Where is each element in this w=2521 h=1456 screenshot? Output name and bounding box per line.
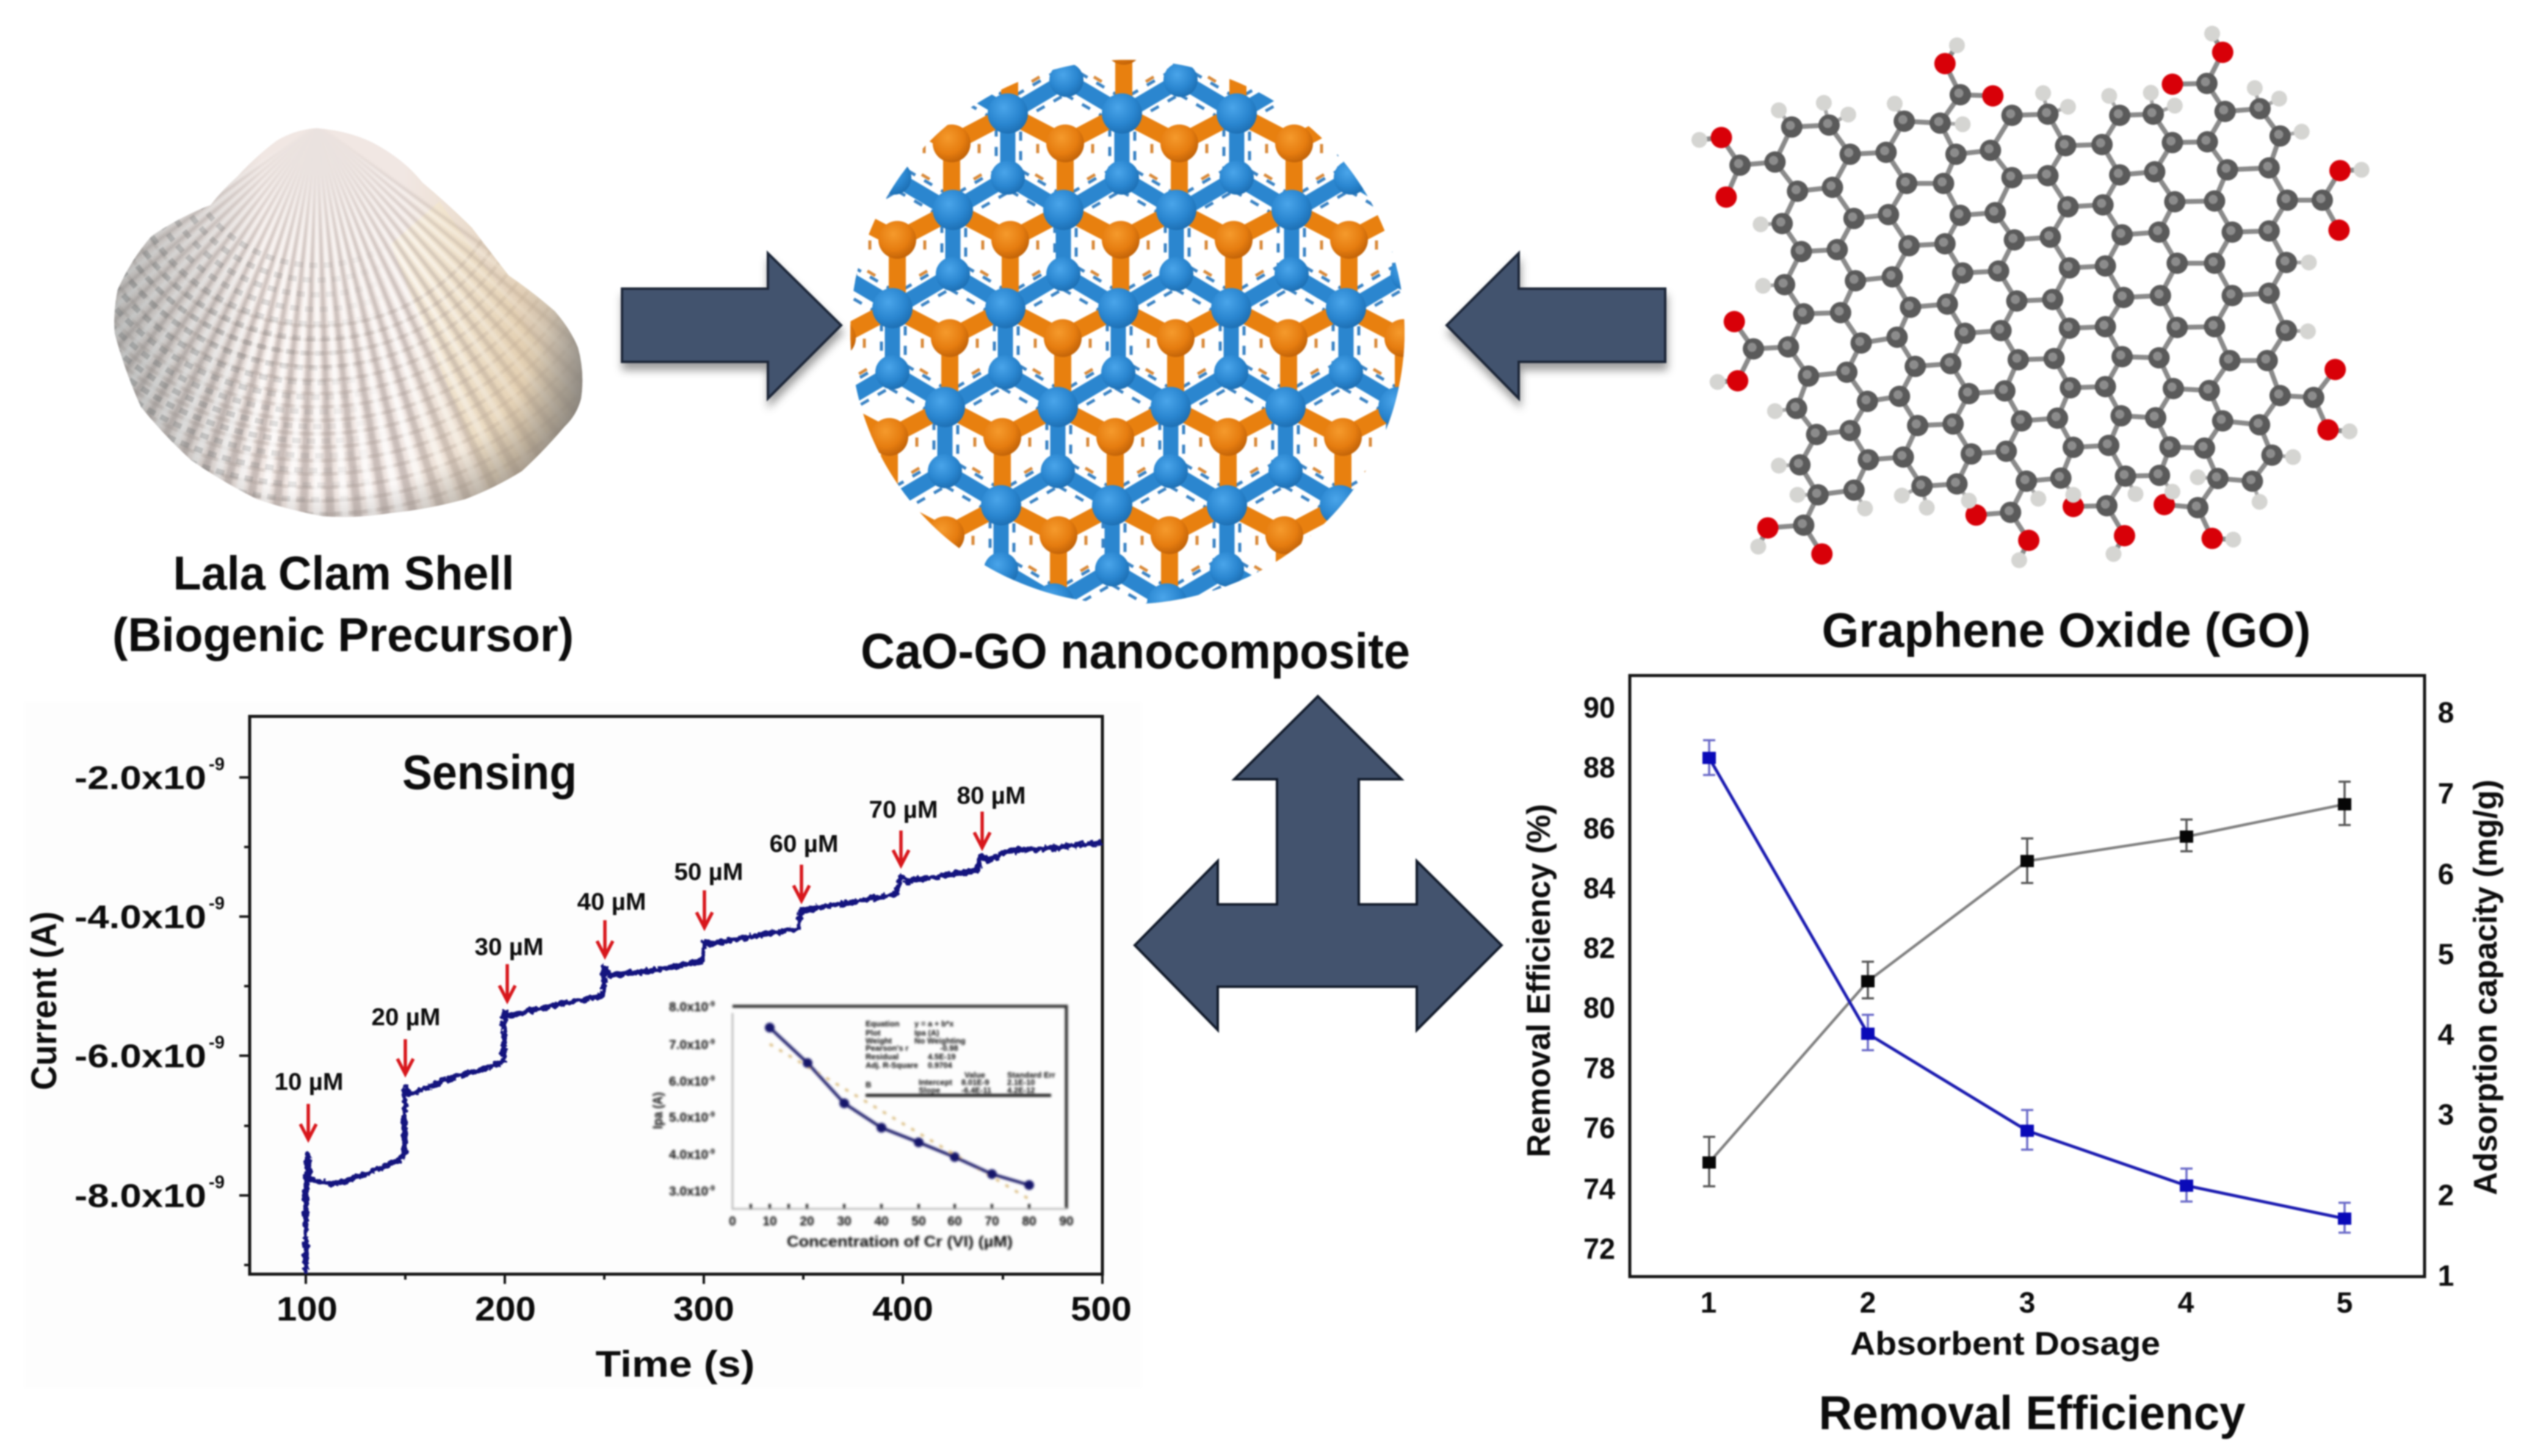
- x axis labels: 3: [2019, 1287, 2035, 1319]
- label: CaO-GO nanocomposite: CaO-GO nanocomposite: [861, 624, 1410, 679]
- inset chart: 4.5E-19: [928, 1052, 956, 1061]
- x axis tick labels: 300: [673, 1289, 734, 1328]
- hydrogen bonds: [1760, 88, 2309, 508]
- y axis title: Current (A): [24, 912, 64, 1090]
- left axis labels: 76: [1583, 1112, 1615, 1145]
- right axis labels: 5: [2438, 939, 2454, 971]
- left axis labels: 88: [1583, 752, 1615, 784]
- carbon bonds: [1699, 34, 2362, 560]
- x axis title: Time (s): [596, 1344, 754, 1385]
- blue layer: [852, 62, 1403, 605]
- x axis labels: 4: [2178, 1287, 2194, 1319]
- label: lala clam shell: (Biogenic Precursor): [112, 608, 574, 661]
- concentration labels: 10 µM: [275, 1069, 343, 1095]
- inset chart: -6.4E-11: [961, 1086, 991, 1095]
- left axis labels: [1583, 692, 1615, 1266]
- concentration labels: 40 µM: [577, 888, 646, 915]
- right axis labels: 4: [2438, 1019, 2454, 1051]
- inset chart: [650, 1000, 1074, 1250]
- y axis tick labels: -9: [209, 754, 225, 774]
- inset chart: -9: [708, 1074, 715, 1083]
- inset chart: y = a + b*x: [914, 1019, 954, 1028]
- x axis labels: 2: [1860, 1287, 1876, 1319]
- right axis title: Adsorption capacity (mg/g): [2467, 780, 2504, 1195]
- right axis labels: 7: [2438, 778, 2454, 810]
- inset chart: 6.0x10: [669, 1075, 708, 1089]
- heading: removal efficiency: Removal Efficiency: [1819, 1386, 2245, 1440]
- left axis labels: 80: [1583, 992, 1615, 1025]
- inset chart: Concentration of Cr (VI) (µM): [787, 1233, 1013, 1250]
- inset chart: B: [866, 1080, 871, 1089]
- label: lala clam shell: Lala Clam Shell: [173, 546, 514, 600]
- inset chart: -0.98: [940, 1043, 958, 1053]
- inset chart: 8.01E-9: [961, 1078, 989, 1087]
- inset chart: 4.0x10: [669, 1148, 708, 1162]
- inset chart: Equation: [866, 1019, 900, 1028]
- inset chart: 7.0x10: [669, 1038, 708, 1052]
- inset chart: Pearson's r: [866, 1043, 908, 1053]
- left axis labels: 84: [1583, 873, 1615, 905]
- left axis labels: 90: [1583, 692, 1615, 724]
- orange layer: [849, 59, 1406, 604]
- inset chart: 4.2E-12: [1007, 1086, 1035, 1095]
- x axis title: Absorbent Dosage: [1850, 1325, 2160, 1362]
- arrow: shell to nanocomposite: [622, 253, 841, 398]
- concentration labels: 30 µM: [475, 934, 543, 960]
- inset chart: -9: [708, 1147, 715, 1156]
- right axis labels: 2: [2438, 1180, 2454, 1212]
- inset chart: 0: [729, 1214, 736, 1228]
- inset chart: Slope: [919, 1086, 940, 1095]
- plot frame and ticks: [239, 716, 1102, 1284]
- right axis labels: 8: [2438, 697, 2454, 729]
- inset chart: 30: [837, 1214, 852, 1228]
- inset chart: 50: [911, 1214, 926, 1228]
- panel: sensing chart: [24, 702, 1141, 1388]
- concentration labels: 60 µM: [769, 831, 839, 857]
- inset chart: Weight: [866, 1036, 892, 1045]
- inset chart: -9: [708, 1110, 715, 1119]
- heading: sensing: Sensing: [402, 745, 577, 799]
- inset chart: 20: [800, 1214, 814, 1228]
- current trace: [306, 842, 1102, 1274]
- inset chart: Standard Err: [1007, 1070, 1055, 1079]
- label: graphene oxide: Graphene Oxide (GO): [1821, 603, 2311, 657]
- right axis labels: 3: [2438, 1099, 2454, 1131]
- carbon atom highlights: [1738, 82, 2321, 524]
- x axis tick labels: 100: [277, 1289, 338, 1328]
- y axis tick labels: -6.0x10: [74, 1038, 206, 1075]
- arrow: three-way nanocomposite arrow: [1135, 696, 1502, 1030]
- x axis labels: 1: [1701, 1287, 1716, 1319]
- adsorption capacity series: [1702, 782, 2351, 1186]
- icon: lala clam shell: [114, 128, 584, 517]
- red concentration arrows: [300, 812, 990, 1139]
- inset chart: 2.1E-10: [1007, 1078, 1035, 1087]
- inset chart: Residual: [866, 1052, 899, 1061]
- concentration labels: 70 µM: [869, 796, 938, 823]
- concentration labels: 20 µM: [371, 1004, 441, 1031]
- inset chart: Value: [964, 1070, 985, 1079]
- icon: graphene oxide molecule: [1699, 34, 2362, 560]
- inset chart: No Weighting: [914, 1036, 966, 1045]
- carbon atoms: [1740, 84, 2322, 525]
- x axis labels: [1701, 1287, 2353, 1319]
- left axis labels: 86: [1583, 813, 1615, 845]
- inset chart: -9: [708, 1037, 715, 1046]
- right axis labels: 1: [2438, 1260, 2454, 1292]
- arrow: graphene oxide to nanocomposite: [1447, 253, 1665, 398]
- inset chart: Intercept: [919, 1078, 953, 1087]
- hydrogen atoms: [1699, 34, 2362, 560]
- inset chart: -9: [708, 1184, 715, 1192]
- inset chart: 70: [985, 1214, 999, 1228]
- inset chart: Plot: [866, 1028, 881, 1037]
- concentration labels: [275, 782, 1025, 1095]
- oxygen atoms: [1721, 52, 2340, 554]
- panel: removal efficiency chart: [1521, 676, 2504, 1440]
- inset chart: 3.0x10: [669, 1184, 708, 1198]
- icon: CaO-GO lattice circle: [849, 59, 1406, 605]
- y axis tick labels: [74, 754, 225, 1214]
- label: lala clam shell: [112, 546, 574, 661]
- left axis labels: 74: [1583, 1173, 1615, 1206]
- inset chart: Ipa (A): [650, 1092, 665, 1129]
- y axis tick labels: -2.0x10: [74, 760, 206, 796]
- x axis tick labels: 500: [1071, 1289, 1132, 1328]
- inset chart: 8.0x10: [669, 1000, 708, 1014]
- y axis tick labels: -9: [209, 1033, 225, 1053]
- inset chart: 5.0x10: [669, 1111, 708, 1125]
- x axis tick labels: [277, 1289, 1132, 1328]
- left axis labels: 78: [1583, 1053, 1615, 1085]
- x axis tick labels: 400: [872, 1289, 933, 1328]
- y axis tick labels: -4.0x10: [74, 899, 206, 935]
- right axis labels: 6: [2438, 859, 2454, 891]
- inset chart: 80: [1022, 1214, 1036, 1228]
- inset chart: 10: [762, 1214, 777, 1228]
- inset chart: 90: [1059, 1214, 1074, 1228]
- inset chart: -9: [708, 1000, 715, 1008]
- removal efficiency series: [1702, 740, 2351, 1233]
- y axis tick labels: -9: [209, 893, 225, 914]
- right axis labels: [2438, 697, 2454, 1292]
- concentration labels: 80 µM: [957, 782, 1025, 809]
- x axis tick labels: 200: [475, 1289, 536, 1328]
- left axis labels: 82: [1583, 932, 1615, 965]
- inset chart: 60: [947, 1214, 962, 1228]
- plot frame: [1630, 676, 2425, 1277]
- y axis tick labels: -8.0x10: [74, 1178, 206, 1214]
- inset chart: Adj. R-Square: [866, 1061, 918, 1070]
- concentration labels: 50 µM: [674, 859, 743, 885]
- inset chart: Ipa (A): [914, 1028, 939, 1037]
- left axis labels: 72: [1583, 1233, 1615, 1266]
- left axis title: Removal Efficiency (%): [1521, 804, 1557, 1157]
- y axis tick labels: -9: [209, 1172, 225, 1192]
- x axis labels: 5: [2337, 1287, 2353, 1319]
- inset chart: 0.9704: [928, 1061, 953, 1070]
- inset chart: 40: [874, 1214, 889, 1228]
